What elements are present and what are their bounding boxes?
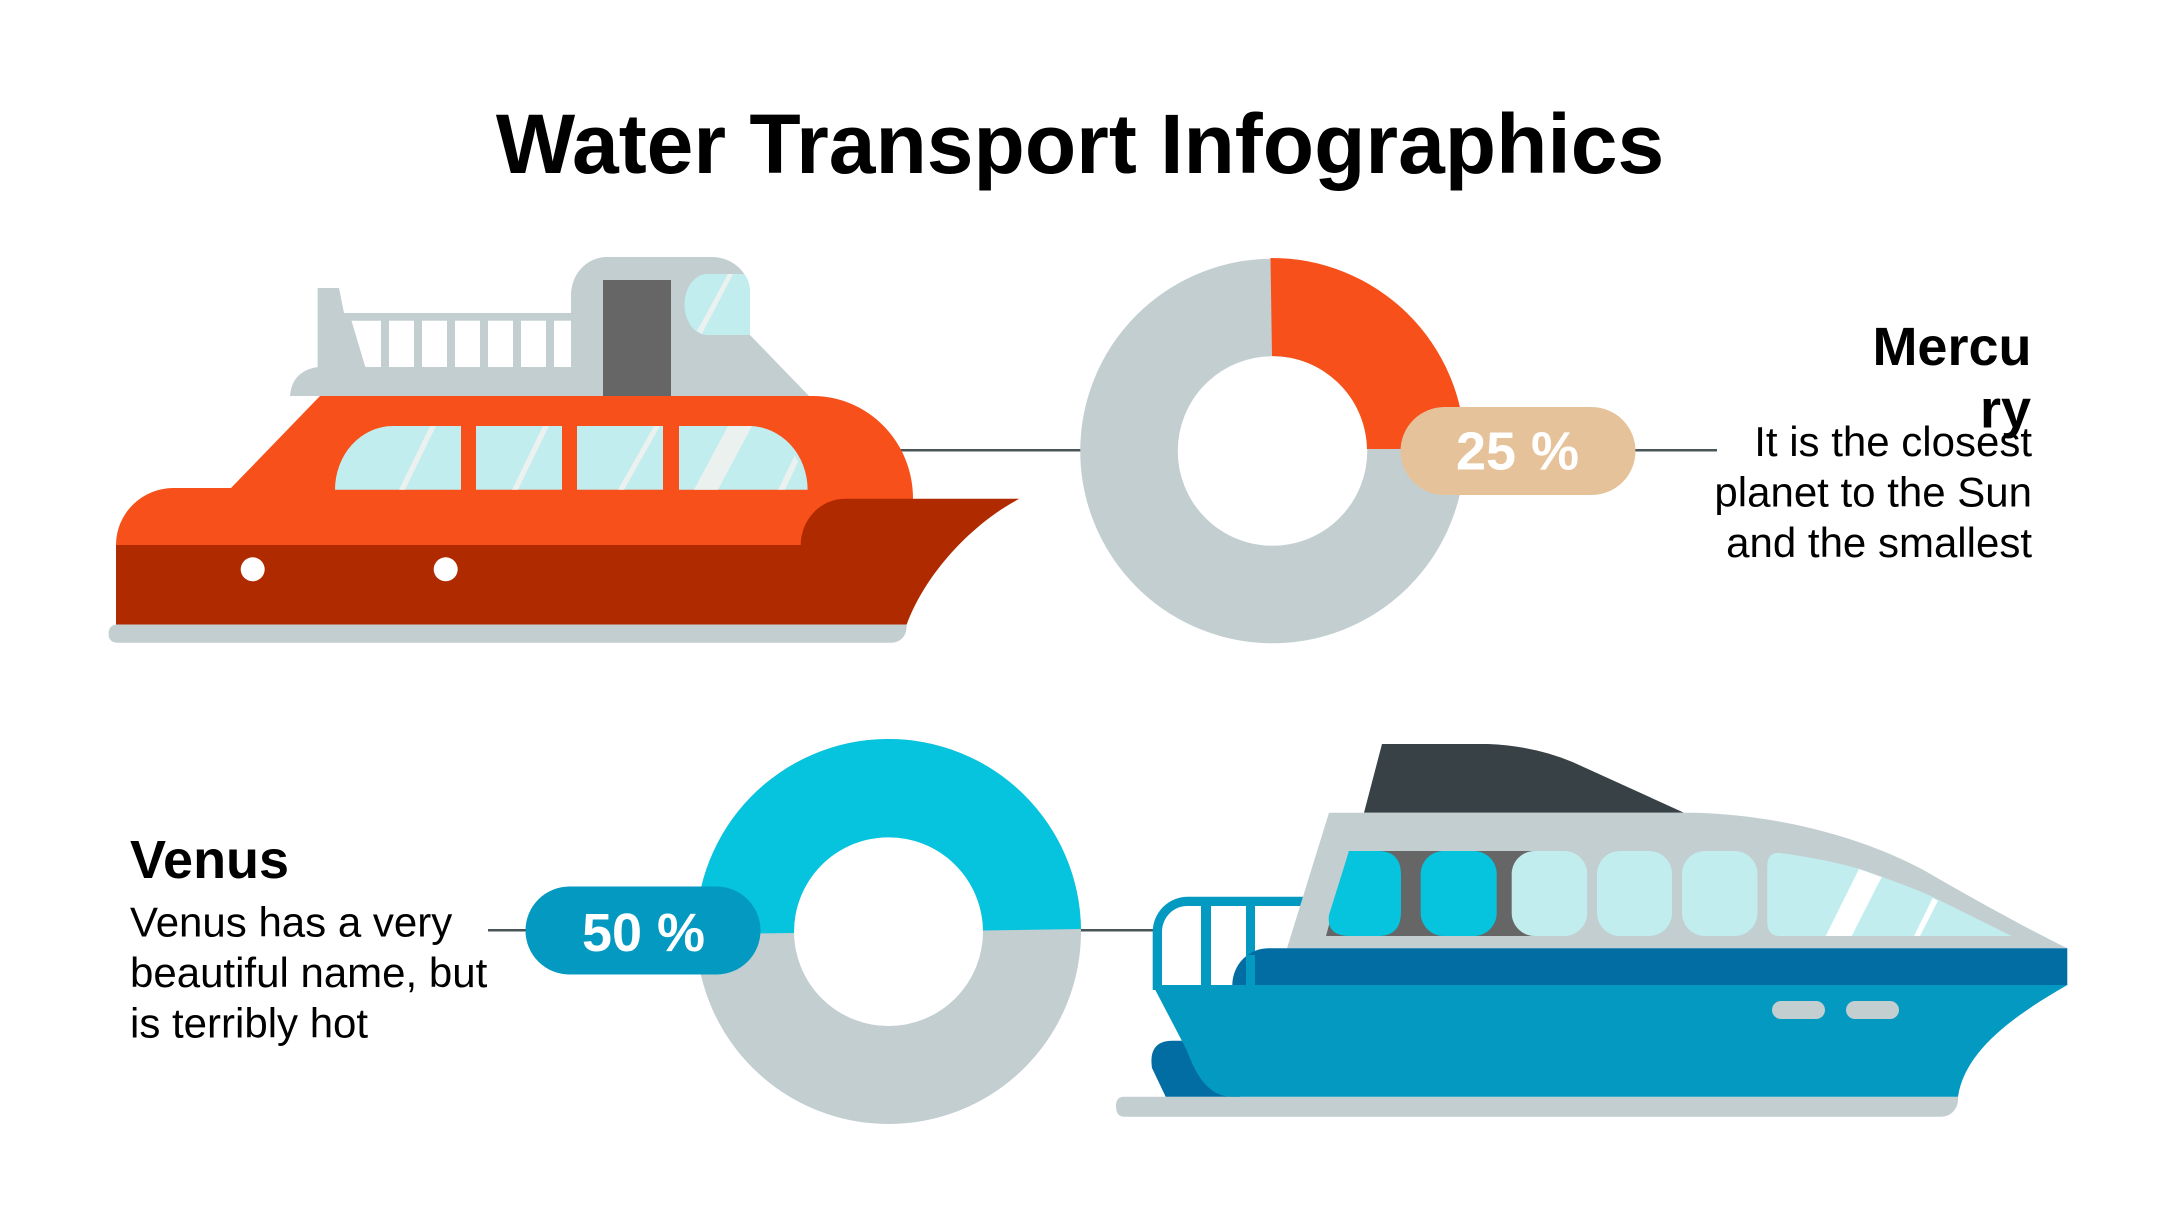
pill: 25 percent	[1400, 407, 1636, 495]
Mercury heading: ry	[1980, 380, 2031, 440]
Venus description: Venus has a very	[130, 898, 452, 946]
window reflections	[399, 426, 798, 490]
boat base plate	[1116, 1097, 1958, 1117]
title: Water Transport Infographics	[496, 97, 1664, 191]
rear bumper	[1151, 1041, 1240, 1097]
cyan half	[696, 739, 1081, 934]
ferry upper deck	[290, 257, 809, 396]
railing gaps	[352, 321, 571, 367]
Venus description	[130, 898, 488, 1046]
Mercury heading	[1872, 317, 2032, 440]
Mercury description: planet to the Sun	[1714, 468, 2032, 516]
boat cabin	[1287, 813, 2067, 948]
ferry base plate	[109, 624, 907, 643]
window glare	[1826, 869, 1938, 936]
Mercury description	[1714, 418, 2032, 566]
icon: blue speed boat	[1116, 744, 2067, 1117]
pale windows	[1512, 851, 2012, 936]
portholes	[241, 557, 458, 581]
pill: 50 percent	[526, 886, 760, 974]
ferry cabin windows	[335, 426, 808, 490]
Venus description: is terribly hot	[130, 1000, 368, 1046]
ferry orange cabin	[116, 396, 913, 545]
railing	[1153, 897, 1312, 990]
Mercury description: and the smallest	[1726, 519, 2032, 566]
Venus heading: Venus	[130, 830, 289, 890]
boat roof	[1364, 744, 1684, 813]
donut chart: 50 percent	[696, 739, 1081, 1075]
Venus description: beautiful name, but	[130, 949, 488, 996]
icon: red ferry boat	[109, 257, 1019, 643]
connector line: Venus to bottom ship	[488, 929, 1156, 932]
rail posts front	[1246, 955, 1255, 985]
boat hull	[1153, 985, 2067, 1097]
Mercury description: It is the closest	[1754, 418, 2032, 465]
connector line: top ship to Mercury	[899, 449, 1717, 452]
orange slice	[1270, 258, 1465, 449]
donut chart: 25 percent	[1129, 258, 1465, 594]
ferry door	[603, 280, 671, 396]
ferry dark hull	[116, 499, 1019, 624]
ferry side window	[684, 274, 750, 335]
cyan windows	[1329, 851, 1497, 936]
pill: 50 percent: 50 %	[582, 903, 705, 963]
Mercury heading: Mercu	[1872, 317, 2032, 377]
hatches	[1772, 1001, 1899, 1019]
pill: 25 percent: 25 %	[1456, 422, 1579, 482]
boat dark stripe	[1232, 948, 2067, 985]
dark window band	[1326, 851, 1541, 936]
